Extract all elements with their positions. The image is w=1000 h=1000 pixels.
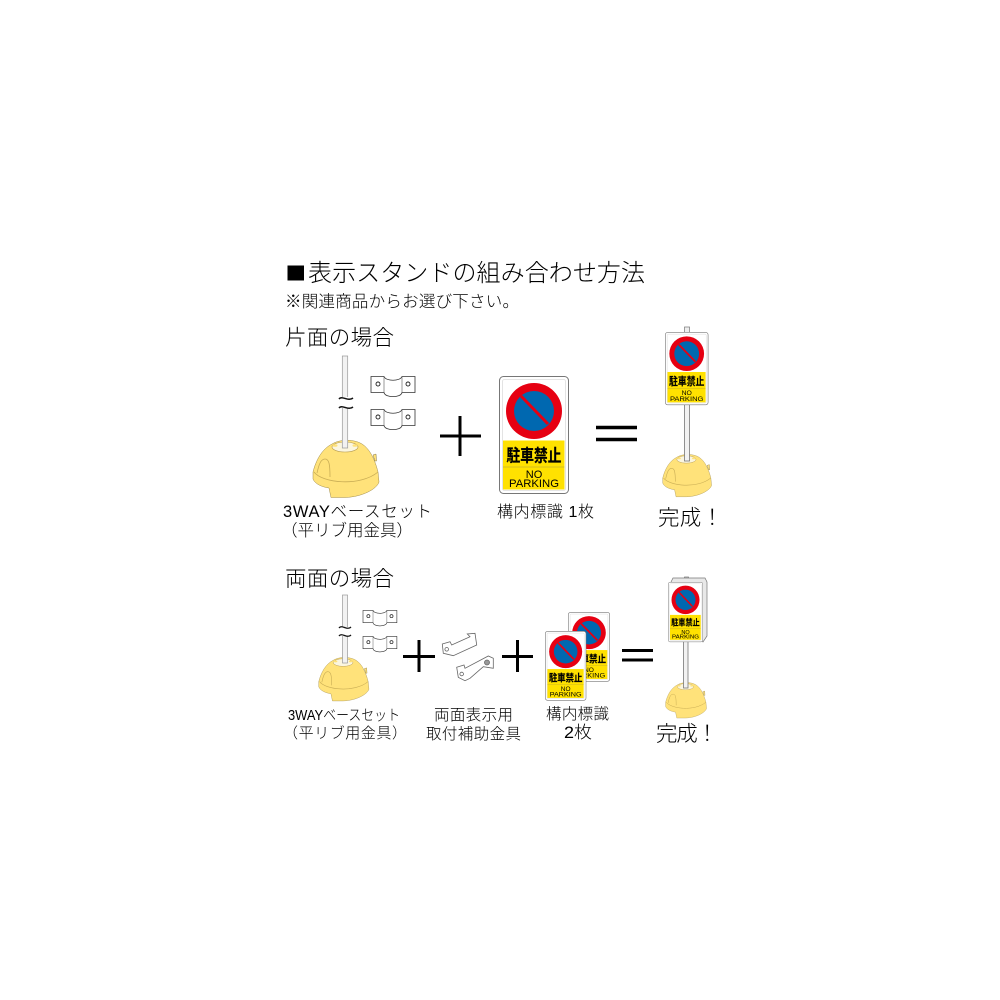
flat rib bracket upper [371,376,415,397]
plus sign [403,640,435,672]
no-parking sign large: PARKING [509,478,559,490]
sign pair: NO [584,667,594,674]
label: sign count: 構内標識 [546,705,609,723]
equals sign [596,428,637,440]
completed stand: single-sided: PARKING [670,396,703,403]
break mark [339,627,351,636]
completed stand: single-sided: NO [682,390,692,397]
flat rib bracket lower [363,636,397,652]
completed stand: double-sided: PARKING [672,635,699,641]
label: auxiliary brackets: 両面表示用 [434,706,513,724]
label: base set [281,503,432,540]
label: base set: 3WAYベースセット [288,707,400,724]
sign pair: PARKING [550,691,582,698]
completed stand: double-sided: 駐車禁止 [671,617,700,628]
break mark [339,398,353,408]
sign pair: PARKING [573,673,605,679]
completed stand: single-sided [663,327,712,497]
label: base set: （平リブ用金具） [283,725,407,742]
label: complete: 完成！ [656,722,718,746]
label: complete: 完成！ [658,506,723,530]
pole [342,356,348,448]
sign pair: NO [561,686,571,693]
no-parking sign large [500,376,568,494]
subtitle note: ※関連商品からお選び下さい。 [285,292,519,311]
completed stand: single-sided: 駐車禁止 [669,375,705,388]
no-parking sign large: NO [526,469,543,481]
flat rib bracket upper [363,610,397,626]
heading: single-sided: 片面の場合 [285,326,394,350]
base set: double-sided [319,595,369,701]
auxiliary brackets [442,633,493,681]
pole [342,595,348,663]
sign pair [545,612,610,700]
label: auxiliary brackets [426,706,521,743]
heading: double-sided: 両面の場合 [285,567,394,591]
label: sign count: 2枚 [564,723,592,742]
label: sign count: 構内標識 1枚 [497,503,594,521]
sign pair: 駐車禁止 [572,653,606,665]
label: sign count [546,705,609,742]
label: auxiliary brackets: 取付補助金具 [426,725,521,743]
base set: single-sided [313,356,379,498]
sign pair: 駐車禁止 [549,671,582,684]
completed stand: double-sided: NO [681,630,690,636]
yellow base [313,440,379,498]
plus sign [502,640,533,672]
completed stand: double-sided [666,577,707,718]
plus sign [440,416,481,456]
equals sign [622,650,653,660]
label: base set [283,707,407,742]
yellow base [319,657,369,701]
flat rib bracket lower [371,410,415,430]
label: base set: 3WAYベースセット [283,503,432,521]
no-parking sign large: 駐車禁止 [506,446,562,466]
label: base set: （平リブ用金具） [281,521,413,540]
title: 表示スタンドの組み合わせ方法 [308,260,645,287]
